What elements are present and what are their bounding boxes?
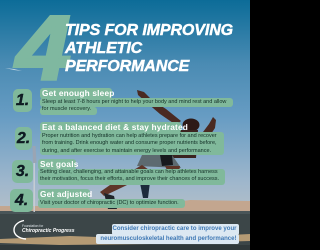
- step 1 text: [40, 98, 233, 107]
- step 2 number badge: 2.: [17, 130, 30, 147]
- step 1 number badge: [13, 89, 32, 112]
- step 4 number badge: [10, 189, 33, 212]
- title: [64, 22, 233, 75]
- step 2 heading: Eat a balanced diet & stay hydrated: [42, 122, 188, 132]
- callout: Consider chiropractic care to improve your: [112, 226, 236, 232]
- title: ATHLETIC: [65, 40, 142, 57]
- step 2: [15, 122, 224, 155]
- logo: [13, 220, 75, 240]
- callout: [96, 224, 239, 244]
- step 4 text: [38, 199, 185, 208]
- step 3 number badge: 3.: [16, 163, 29, 180]
- title: TIPS FOR IMPROVING: [65, 22, 233, 39]
- callout: neuromusculoskeletal health and performance!: [100, 236, 236, 242]
- step 1: Sleep at least 7-8 hours per night to help your body and mind rest and allow: [42, 99, 226, 105]
- step 2: Proper nutrition and hydration can help athletes prepare for and recover: [42, 133, 217, 139]
- step 2 text: [40, 132, 224, 155]
- logo: Chiropractic Progress: [22, 228, 75, 234]
- step 4: Visit your doctor of chiropractic (DC) to optimize function.: [40, 200, 179, 206]
- step 3: Setting clear, challenging, and attainable goals can help athletes harness: [40, 169, 218, 175]
- step 1 heading: Get enough sleep: [42, 88, 114, 98]
- background photo: sky, desert and road: [0, 0, 250, 250]
- step 4: [10, 189, 185, 212]
- step 3 heading: Set goals: [40, 159, 79, 169]
- step 2 number badge: [15, 127, 32, 150]
- step 1 number badge: 1.: [16, 92, 29, 109]
- runner athlete: [100, 90, 216, 209]
- step 3: their motivation, focus their efforts, and improve their chances of success.: [40, 176, 219, 182]
- step 3: [12, 159, 225, 185]
- logo text: Foundation for: [22, 224, 43, 228]
- step 4 heading: Get adjusted: [40, 189, 92, 199]
- step 3 number badge: [12, 160, 33, 183]
- step 2: from training. Drink enough water and consume proper nutrients before,: [42, 140, 217, 146]
- title: PERFORMANCE: [65, 58, 189, 75]
- step 2: during, and after exercise to maintain energy levels and performance.: [42, 148, 211, 154]
- step 4 number badge: 4.: [15, 192, 28, 209]
- step 3 text: [38, 169, 225, 185]
- big number 4: 4: [16, 0, 71, 99]
- step 1: for muscle recovery.: [42, 106, 91, 112]
- step 1: [13, 88, 233, 115]
- logo arc: [13, 220, 26, 240]
